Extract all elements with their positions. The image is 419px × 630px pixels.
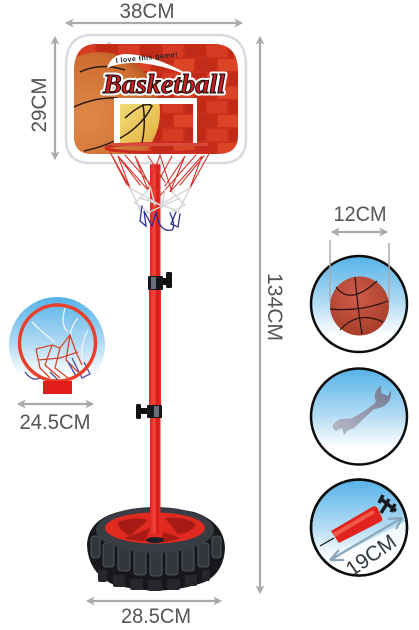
dimension: backboard width 38CM: 38CM [120,0,174,23]
dimension: hoop diameter 24.5CM: 24.5CM [20,411,90,434]
Basketball wordmark: Basketball [102,69,226,99]
dimension: ball 12CM: 12CM [334,203,386,226]
dimension: base width 28.5CM: 28.5CM [121,605,191,628]
circle: pump [311,480,408,590]
pump handle [379,495,396,513]
dimension: backboard height 29CM: 29CM [28,78,51,132]
dimension: backboard height 29CM [28,38,55,158]
tyre base [87,505,225,591]
hoop ring [20,305,96,381]
rim [106,143,214,152]
slogan text: I love this game! [115,52,178,65]
hoop detail [9,297,105,394]
circle: wrench [311,368,407,464]
pump length arrow [330,518,402,560]
target square [114,98,197,143]
pump needle [320,538,334,546]
hoop bracket [43,381,72,394]
pole [149,150,161,535]
printed basketball [74,52,160,154]
backboard [64,34,248,164]
dimension: base width 28.5CM [88,601,220,628]
circle: ball [311,240,407,352]
pump body [331,506,382,543]
lower tread blocks [98,570,210,591]
height clamp upper [148,272,172,290]
Basketball wordmark: Basketball [102,69,226,99]
net [110,152,210,230]
dimension: total height 134CM: 134CM [263,273,286,341]
slogan swoosh [107,54,197,80]
height clamp lower [136,404,162,419]
pump length text: 19CM [342,530,401,581]
upper tread blocks [91,536,221,576]
hoop net [25,308,90,380]
